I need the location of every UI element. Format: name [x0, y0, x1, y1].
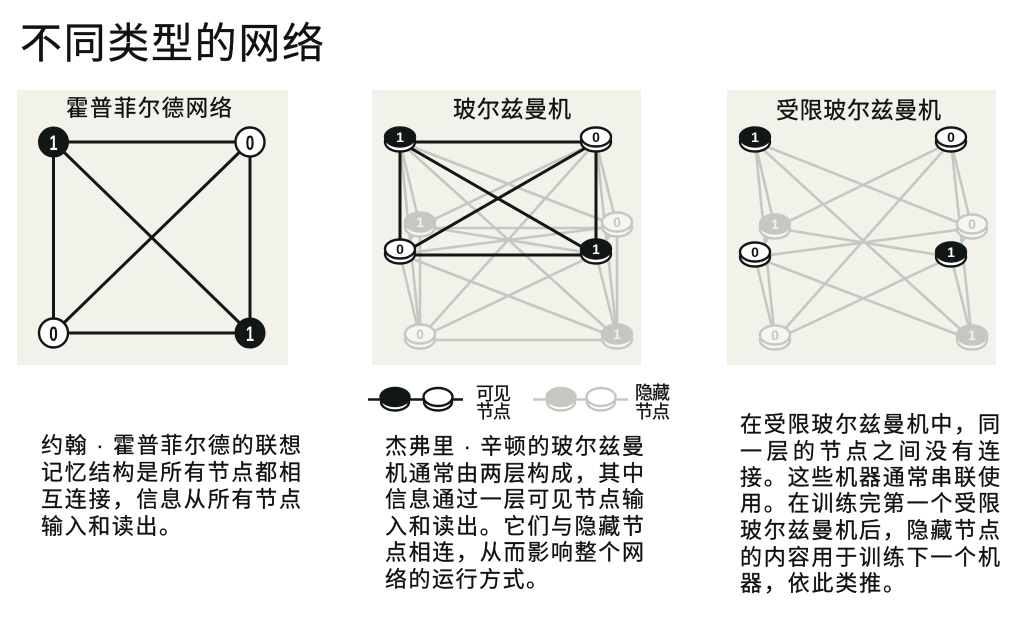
text block: Boltzmann description: 入和读出。它们与隐藏节 [385, 514, 644, 539]
text block: Hopfield description: 记忆结构是所有节点都相 [41, 460, 301, 485]
visible nodes [385, 128, 611, 264]
visible nodes: 1 [592, 241, 600, 257]
text block: restricted Boltzmann description: 在受限玻尔兹曼机中，同 [740, 412, 1000, 437]
hidden nodes: 0 [613, 214, 621, 230]
node: top right 0: 0 [246, 132, 254, 155]
heading: restricted Boltzmann machine: 受限玻尔兹曼机 [776, 97, 941, 123]
text block: Boltzmann description: 信息通过一层可见节点输 [385, 487, 644, 512]
visible nodes: 0 [947, 129, 955, 145]
text block: restricted Boltzmann description: 的内容用于训练下一个机 [740, 545, 1000, 570]
text block: restricted Boltzmann description: 玻尔兹曼机后，隐藏节点 [740, 518, 1000, 543]
text block: restricted Boltzmann description [740, 412, 1000, 596]
hidden nodes: 1 [968, 327, 976, 343]
heading: Hopfield network: 霍普菲尔德网络 [66, 96, 232, 121]
legend: hidden node label: 节点 [635, 402, 670, 422]
text block: Hopfield description [41, 433, 301, 539]
panel: Boltzmann machine [372, 90, 641, 365]
title: 不同类型的网络 [20, 20, 324, 67]
hidden nodes: 0 [416, 326, 424, 342]
text block: restricted Boltzmann description: 器，依此类推。 [740, 571, 905, 596]
text block: restricted Boltzmann description: 一层的节点之间没有连 [740, 439, 1000, 464]
visible nodes [740, 128, 966, 266]
visible nodes: 1 [751, 129, 759, 145]
node: top left 1: 1 [50, 132, 58, 155]
visible edges [400, 142, 596, 255]
text block: Boltzmann description: 络的运行方式。 [385, 567, 548, 592]
hidden nodes [405, 212, 632, 348]
legend: visible node symbol [368, 388, 463, 410]
hidden nodes: 1 [613, 326, 621, 342]
hidden nodes: 1 [771, 216, 779, 232]
text block: Boltzmann description: 杰弗里 · 辛顿的玻尔兹曼 [385, 434, 644, 459]
text block: Boltzmann description [385, 434, 644, 592]
node: bottom right 1 [236, 318, 264, 348]
visible nodes: 0 [592, 129, 600, 145]
panel: Hopfield network [17, 90, 288, 365]
hidden nodes: 0 [771, 327, 779, 343]
visible nodes: 0 [751, 244, 759, 260]
hidden nodes: 0 [968, 216, 976, 232]
node: bottom right 1: 1 [246, 323, 254, 346]
edges between layers [755, 142, 972, 340]
hidden nodes [760, 214, 987, 350]
hidden nodes: 1 [416, 214, 424, 230]
network edges [54, 142, 250, 333]
legend: hidden node symbol [533, 388, 628, 410]
text block: restricted Boltzmann description: 用。在训练完第一个受限 [740, 491, 1000, 516]
hidden edges [400, 142, 617, 340]
legend: visible node label: 节点 [476, 402, 511, 422]
legend: hidden node label: 隐藏 [635, 383, 670, 403]
visible nodes: 1 [396, 129, 404, 145]
legend: visible node label [476, 384, 511, 422]
node: bottom left 0 [39, 318, 68, 348]
visible nodes: 1 [947, 244, 955, 260]
text block: Hopfield description: 约翰 · 霍普菲尔德的联想 [41, 433, 301, 458]
text block: Hopfield description: 互连接，信息从所有节点 [41, 487, 301, 512]
legend: hidden node label [635, 383, 670, 422]
heading: Boltzmann machine: 玻尔兹曼机 [453, 96, 571, 122]
visible nodes: 0 [396, 241, 404, 257]
node: top right 0 [236, 128, 264, 156]
node: bottom left 0: 0 [49, 323, 58, 346]
text block: restricted Boltzmann description: 接。这些机器通常串联使 [740, 465, 1000, 490]
legend: visible node label: 可见 [476, 384, 511, 404]
text block: Hopfield description: 输入和读出。 [41, 514, 181, 539]
text block: Boltzmann description: 点相连，从而影响整个网 [385, 540, 644, 565]
node: top left 1 [39, 128, 68, 156]
panel: restricted Boltzmann machine [727, 90, 996, 365]
legend [368, 383, 670, 422]
text block: Boltzmann description: 机通常由两层构成，其中 [385, 461, 644, 486]
